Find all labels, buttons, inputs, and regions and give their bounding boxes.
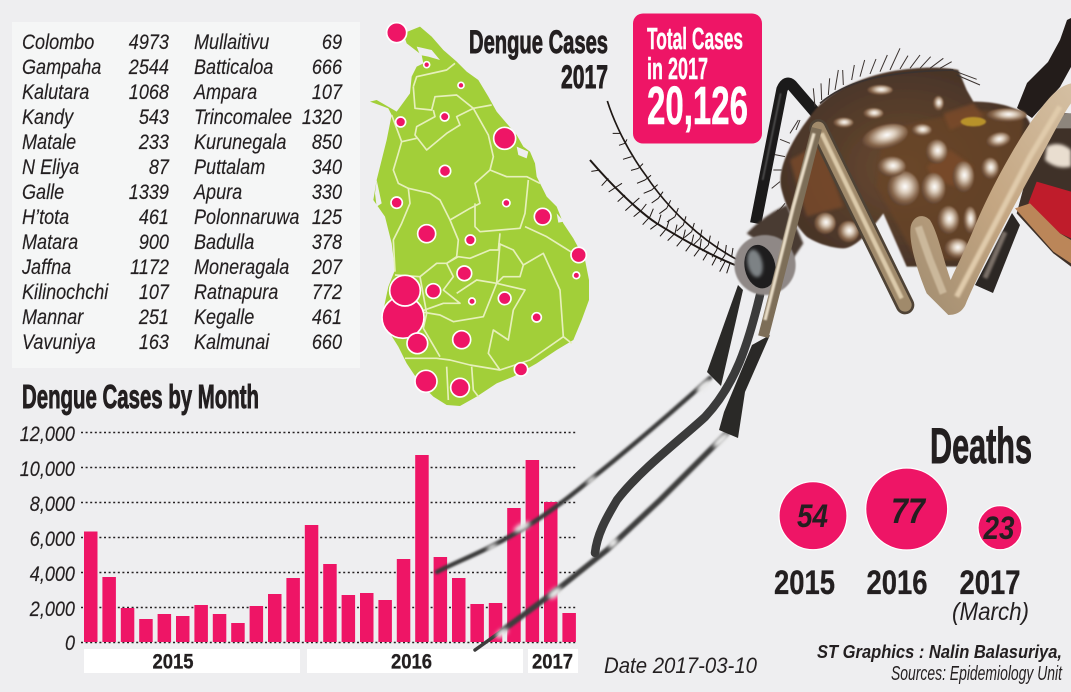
panel: district case table: 163 — [139, 331, 169, 354]
panel: district case table: 1172 — [130, 256, 169, 279]
panel: district case table: 543 — [139, 106, 169, 129]
panel: district case table: 1339 — [129, 181, 169, 204]
panel: district case table: 107 — [312, 81, 343, 104]
chart: y-axis labels: 8,000 — [30, 493, 75, 516]
deaths: March note: (March) — [952, 598, 1029, 626]
panel: district case table: Kandy — [22, 106, 74, 129]
panel: district case table: Colombo — [22, 31, 94, 54]
panel: district case table: 340 — [312, 156, 342, 179]
mosquito: tan forelegs — [763, 83, 1071, 337]
panel: district case table: Apura — [193, 181, 242, 204]
panel: district case table: 1320 — [302, 106, 342, 129]
panel: district case table: 2544 — [128, 56, 169, 79]
panel: district case table: 87 — [149, 156, 170, 179]
panel: district case table: Galle — [22, 181, 64, 204]
callout: total cases in 2017: 20,126 — [647, 76, 748, 136]
deaths: year labels: 2016 — [866, 564, 928, 602]
chart: y-axis labels: 2,000 — [29, 598, 75, 621]
deaths: 2015 bubble — [779, 482, 847, 550]
panel: district case table: 107 — [139, 281, 170, 304]
panel: district case table: Batticaloa — [194, 56, 273, 79]
panel: district case table: 125 — [312, 206, 342, 229]
mosquito: far black legs — [975, 18, 1071, 293]
panel: district case table: 772 — [312, 281, 342, 304]
panel: district case table: 461 — [139, 206, 169, 229]
deaths: 2017 bubble — [978, 506, 1022, 550]
panel: district case table: Jaffna — [21, 256, 71, 279]
panel: district case table: Matale — [22, 131, 76, 154]
mosquito: dark leg wedges — [707, 285, 770, 438]
callout: total cases in 2017: Total Cases — [647, 21, 743, 56]
chart: year strip 2016: 2016 — [391, 650, 432, 674]
panel: district case table: 378 — [312, 231, 342, 254]
panel: district case table: Moneragala — [194, 256, 289, 279]
panel: district case table: 233 — [138, 131, 169, 154]
chart: y-axis labels: 10,000 — [20, 458, 75, 481]
panel: district case table: 461 — [312, 306, 342, 329]
heading: Dengue Cases 2017: 2017 — [561, 59, 608, 95]
heading: Dengue Cases 2017: Dengue Cases — [469, 24, 608, 60]
panel: district case table: H’tota — [22, 206, 69, 229]
panel: district case table: Gampaha — [22, 56, 101, 79]
chart: y-axis labels — [20, 423, 75, 655]
mosquito: lower legs — [437, 295, 760, 650]
credits — [817, 642, 1063, 685]
illustration: mosquito — [437, 18, 1071, 650]
mosquito: antennae — [590, 101, 737, 273]
chart: year strip 2015: 2015 — [152, 650, 194, 674]
panel: district case table: Mannar — [22, 306, 85, 329]
panel: district case table: Kilinochchi — [22, 281, 109, 304]
panel: district case table: 207 — [311, 256, 343, 279]
panel: district case table: Kurunegala — [194, 131, 286, 154]
panel: district case table: Ampara — [193, 81, 257, 104]
map: island outline — [370, 27, 589, 406]
chart: y-axis labels: 6,000 — [30, 528, 75, 551]
chart: y-axis labels: 0 — [65, 632, 75, 655]
map: district borders — [392, 63, 573, 400]
deaths: year labels — [774, 564, 1020, 602]
deaths: year labels: 2017 — [960, 564, 1020, 602]
deaths: 2017 bubble: 23 — [983, 510, 1015, 546]
panel: district case table — [12, 22, 360, 368]
chart: year strip 2015 — [84, 649, 300, 674]
panel: district case table: Ratnapura — [194, 281, 278, 304]
heading: Dengue Cases 2017 — [469, 24, 608, 95]
callout: total cases in 2017: in 2017 — [647, 51, 708, 86]
deaths: 2015 bubble: 54 — [797, 498, 828, 534]
mosquito: scale spots — [814, 85, 1027, 258]
panel: district case table: Kegalle — [194, 306, 254, 329]
panel: district case table: Puttalam — [194, 156, 265, 179]
callout: total cases in 2017 — [633, 14, 762, 144]
panel: district case table: Kalmunai — [194, 331, 270, 354]
heading: Dengue Cases by Month: Dengue Cases by Month — [22, 378, 259, 415]
deaths: 2016 bubble — [866, 468, 948, 550]
panel: district case table: N Eliya — [22, 156, 79, 179]
panel: district case table: 850 — [312, 131, 342, 154]
panel: district case table: Matara — [22, 231, 78, 254]
panel: district case table: Vavuniya — [22, 331, 96, 354]
mosquito: neck and bristles — [753, 48, 980, 230]
panel: district case table: Trincomalee — [194, 106, 292, 129]
bar chart: dengue cases by month — [20, 423, 578, 674]
map: district case bubbles — [382, 23, 586, 397]
panel: district case table: Polonnaruwa — [194, 206, 300, 229]
mosquito: thorax — [780, 68, 1030, 267]
panel: district case table: 330 — [312, 181, 342, 204]
chart: year strip 2016 — [307, 649, 523, 674]
chart: monthly bars — [84, 455, 576, 642]
panel: district case table: 4973 — [129, 31, 169, 54]
panel: district case table: 900 — [139, 231, 169, 254]
mosquito: black foreleg — [756, 83, 818, 223]
chart: year strip 2017: 2017 — [532, 650, 573, 674]
panel: district case table: Mullaitivu — [194, 31, 269, 54]
panel: district case table: 1068 — [129, 81, 169, 104]
chart: y-axis labels: 12,000 — [20, 423, 75, 446]
chart: y-axis labels: 4,000 — [30, 563, 75, 586]
mosquito: head and eye — [734, 235, 796, 295]
mosquito: abdomen — [1015, 113, 1071, 267]
panel: district case table: 69 — [322, 31, 342, 54]
panel: district case table: Kalutara — [22, 81, 89, 104]
panel: district case table: 251 — [138, 306, 169, 329]
map: Sri Lanka dengue cases by district — [370, 23, 589, 406]
deaths: year labels: 2015 — [774, 564, 835, 602]
deaths: 2016 bubble: 77 — [891, 492, 926, 531]
panel: district case table: 660 — [312, 331, 342, 354]
date line: Date 2017-03-10 — [604, 653, 758, 678]
mosquito: pale leg joints — [486, 377, 731, 640]
panel: district case table: 666 — [312, 56, 342, 79]
panel: district case table: Badulla — [194, 231, 254, 254]
